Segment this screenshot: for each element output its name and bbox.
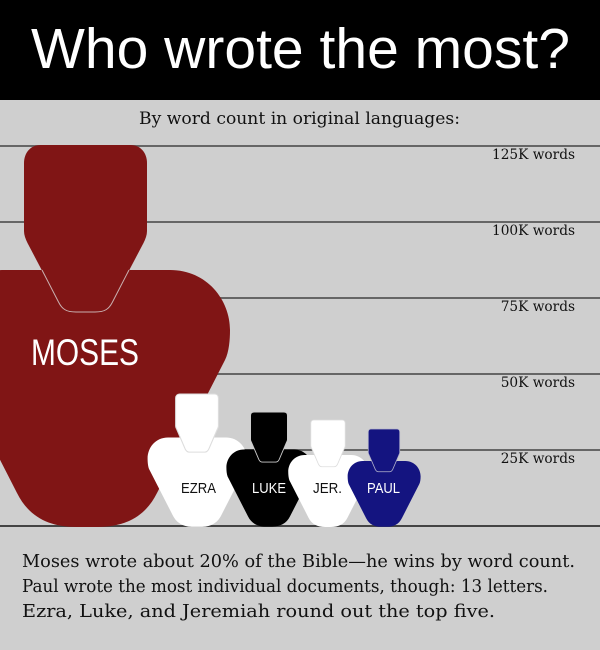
summary text: Moses wrote about 20% of the Bible—he wins by word count. [22,552,575,572]
figure: Jeremiah [288,420,368,527]
figure: Luke: LUKE [252,480,286,497]
figure: Luke [226,412,312,527]
chart gridlines and scale labels: 125K words [492,147,575,163]
title banner: Who wrote the most? [31,17,570,81]
chart gridlines and scale labels: 50K words [501,375,575,391]
figure: Paul [348,429,421,527]
title banner [0,0,600,100]
figure: Ezra: EZRA [181,480,216,497]
chart gridlines and scale labels [0,146,600,526]
figure: Moses [0,145,230,527]
chart gridlines and scale labels: 100K words [492,223,575,239]
summary text: Paul wrote the most individual documents, though: 13 letters. [22,577,548,597]
chart gridlines and scale labels: 25K words [501,451,575,467]
chart gridlines and scale labels: 75K words [501,299,575,315]
summary text [22,552,575,622]
subtitle: By word count in original languages: [139,109,460,129]
figure: Moses: MOSES [31,332,139,373]
figure: Paul: PAUL [367,480,400,497]
summary text: Ezra, Luke, and Jeremiah round out the top five. [22,602,495,622]
figure: Jeremiah: JER. [313,480,342,497]
figure: Ezra [148,394,247,527]
